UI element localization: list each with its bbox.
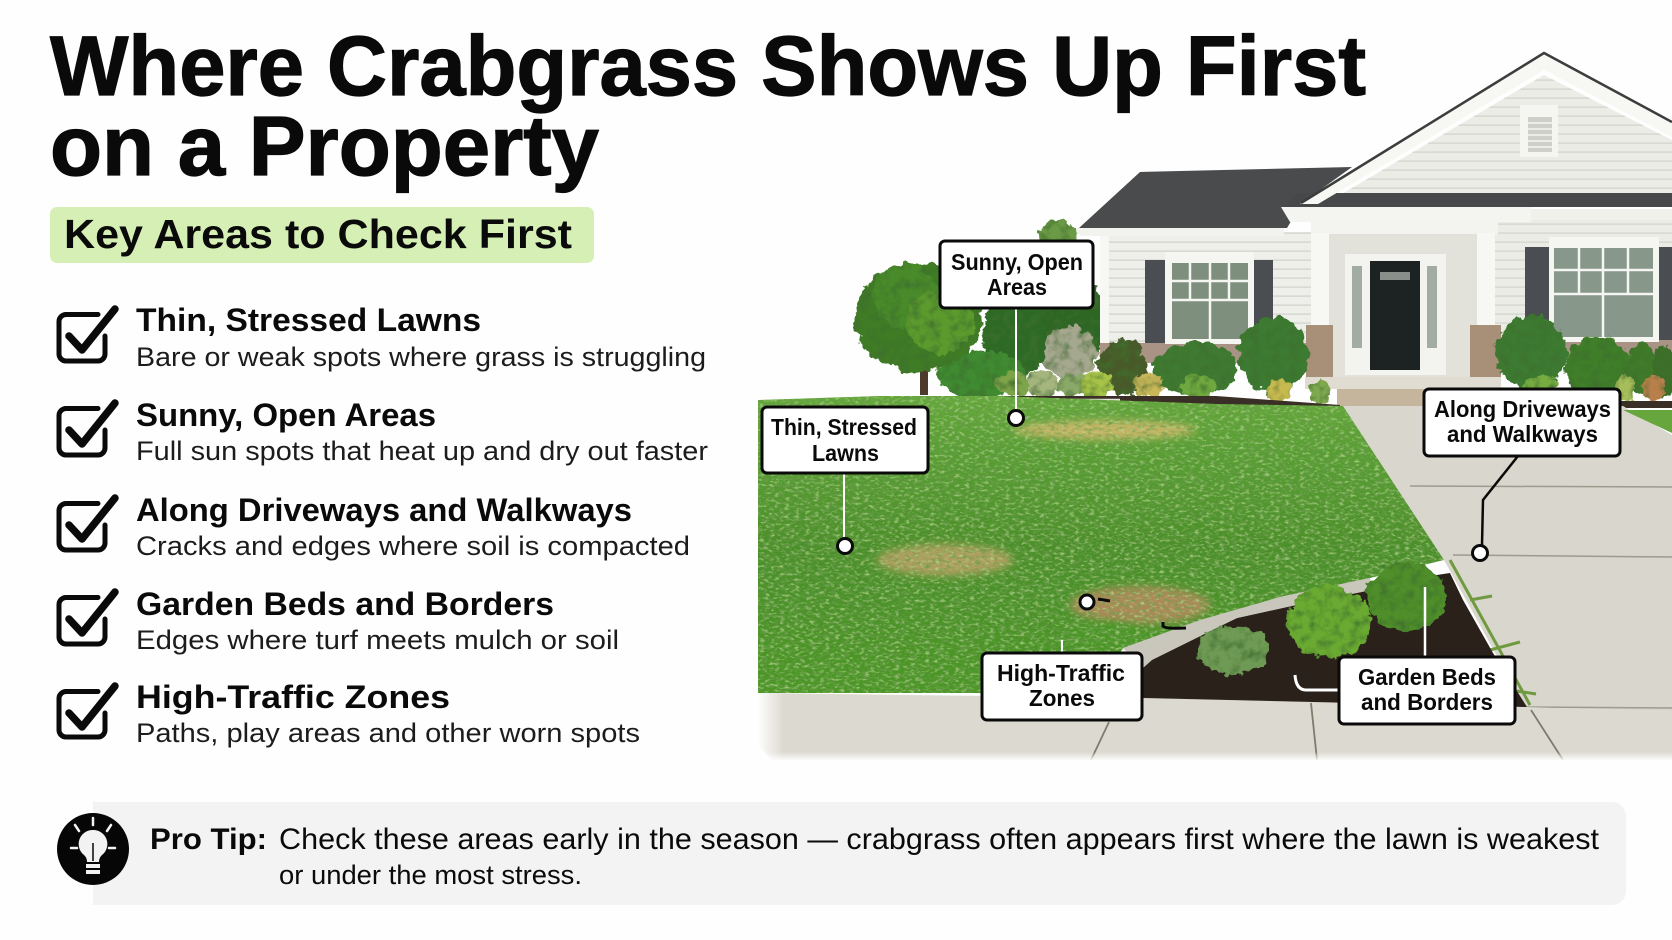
callout: high-traffic zones: Zones <box>1029 685 1095 711</box>
callout: along driveways and walkways: and Walkways <box>1447 421 1598 447</box>
porch columns <box>1306 222 1501 377</box>
callout: along driveways and walkways <box>1424 389 1620 560</box>
sidewalk <box>758 693 1672 761</box>
shrubs <box>996 316 1672 404</box>
item: thin, stressed lawns <box>59 302 706 372</box>
item: along driveways and walkways: Cracks and edges where soil is compacted <box>136 531 690 561</box>
pro tip text: Pro Tip: <box>150 823 267 856</box>
pro tip text: or under the most stress. <box>279 860 582 890</box>
title: on a Property <box>50 99 599 193</box>
roof <box>1076 53 1672 236</box>
lawn <box>758 396 1444 693</box>
callout: along driveways and walkways: Along Driveways <box>1434 396 1611 422</box>
callout: thin, stressed lawns <box>762 407 928 554</box>
callout: sunny, open areas <box>940 241 1093 426</box>
driveway <box>1343 406 1672 712</box>
garden bed <box>1123 573 1527 707</box>
mulch edging <box>975 396 1672 412</box>
front door <box>1345 254 1446 375</box>
callout: garden beds and borders: Garden Beds <box>1358 664 1496 690</box>
subtitle badge: Key Areas to Check First <box>64 211 572 257</box>
callout: high-traffic zones: High-Traffic <box>997 660 1125 686</box>
illustration: house and yard <box>758 53 1672 761</box>
item: high-traffic zones <box>59 679 640 748</box>
callout: sunny, open areas: Sunny, Open <box>951 249 1083 275</box>
item: garden beds and borders <box>59 586 619 655</box>
tree <box>854 263 982 395</box>
callout: garden beds and borders: and Borders <box>1361 689 1493 715</box>
item: along driveways and walkways: Along Driveways and Walkways <box>136 492 632 528</box>
pro tip text <box>150 823 1600 890</box>
callout: sunny, open areas: Areas <box>987 274 1047 300</box>
item: sunny, open areas: Sunny, Open Areas <box>136 397 436 433</box>
callout: garden beds and borders <box>1295 587 1515 724</box>
callout: thin, stressed lawns: Lawns <box>812 440 879 466</box>
left window <box>1145 252 1273 344</box>
panel: checklist <box>59 302 708 748</box>
item: thin, stressed lawns: Thin, Stressed Lawns <box>136 302 481 338</box>
item: high-traffic zones: High-Traffic Zones <box>136 679 450 715</box>
front steps <box>1305 377 1501 406</box>
background trees <box>938 220 1105 399</box>
item: sunny, open areas: Full sun spots that heat up and dry out faster <box>136 436 708 466</box>
title: Where Crabgrass Shows Up First <box>50 19 1366 113</box>
callout: thin, stressed lawns: Thin, Stressed <box>771 414 917 440</box>
pro tip text: Check these areas early in the season — crabgrass often appears first where the lawn is weakest <box>279 823 1600 856</box>
item: garden beds and borders: Edges where turf meets mulch or soil <box>136 625 619 655</box>
gable vent <box>1520 105 1558 157</box>
item: along driveways and walkways <box>59 492 690 561</box>
callout: high-traffic zones <box>982 595 1186 720</box>
bare patches <box>877 420 1210 646</box>
house walls <box>1100 75 1672 377</box>
garden plants <box>1197 563 1446 674</box>
item: garden beds and borders: Garden Beds and Borders <box>136 586 554 622</box>
item: high-traffic zones: Paths, play areas and other worn spots <box>136 718 640 748</box>
right window <box>1525 237 1672 342</box>
item: sunny, open areas <box>59 397 708 466</box>
title <box>50 19 1366 193</box>
item: thin, stressed lawns: Bare or weak spots where grass is struggling <box>136 342 706 372</box>
icon: light bulb <box>57 813 129 885</box>
panel: pro tip <box>57 802 1626 905</box>
